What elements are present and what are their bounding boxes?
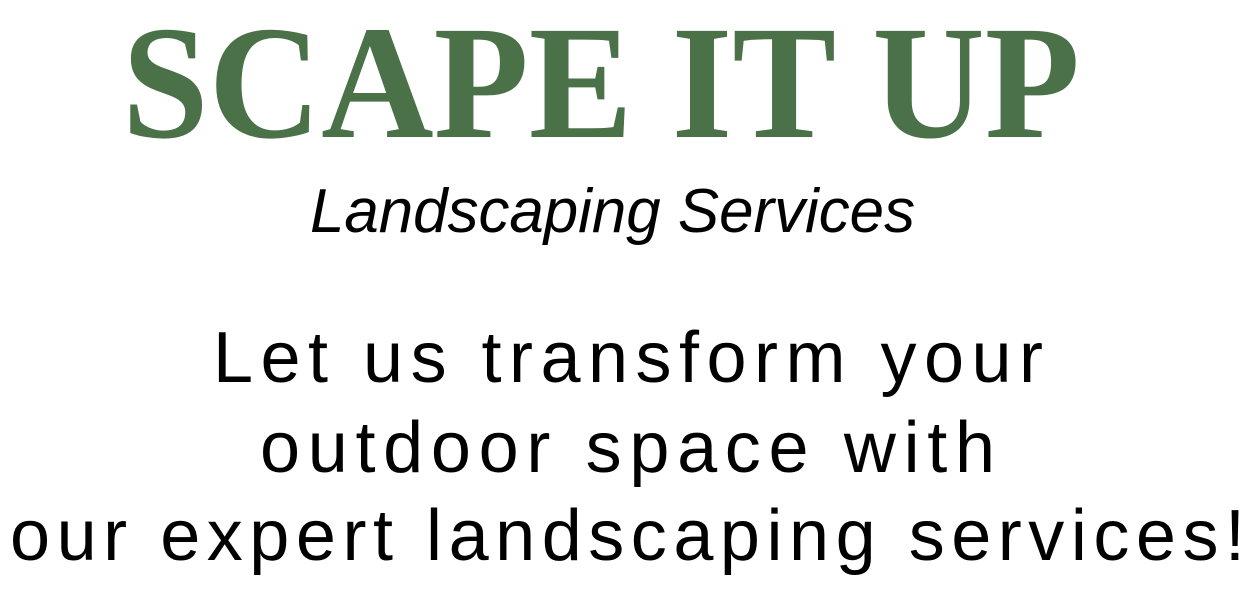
tagline text block: [10, 318, 1245, 576]
subtitle: Landscaping Services: [310, 177, 915, 246]
tagline text block: our expert landscaping services!: [10, 496, 1245, 576]
tagline text block: Let us transform your: [213, 318, 1043, 398]
tagline text block: outdoor space with: [260, 408, 995, 488]
